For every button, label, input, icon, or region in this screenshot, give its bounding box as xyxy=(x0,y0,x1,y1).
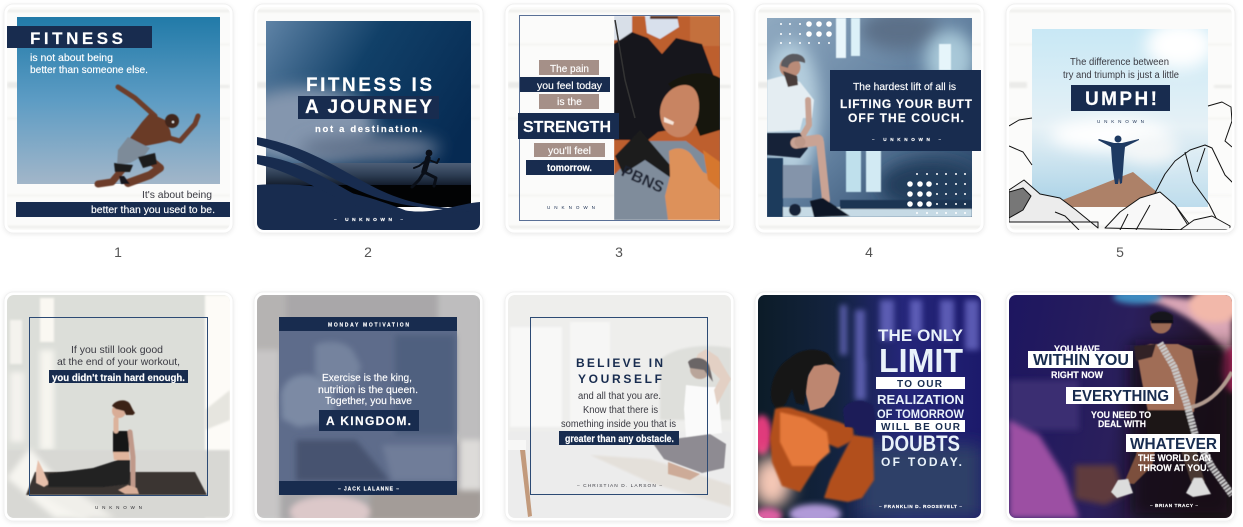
dots: bottom right xyxy=(907,173,966,214)
heading: fitness is a journey: A JOURNEY xyxy=(305,97,432,118)
text: quote body: greater than any obstacle. xyxy=(565,434,674,445)
photo: bright studio xyxy=(7,295,235,518)
text: still look good: at the end of your workout, xyxy=(57,356,180,368)
text: the difference between: try and triumph is just a little xyxy=(1063,70,1179,81)
attribution: – CHRISTIAN D. LARSON – xyxy=(577,483,662,489)
card 5: umph xyxy=(1006,4,1237,233)
text: exercise quote: nutrition is the queen. xyxy=(318,384,418,396)
frame xyxy=(520,16,720,220)
attribution: UNKNOWN xyxy=(547,205,595,210)
panel: translucent navy: – JACK LALANNE – xyxy=(338,486,399,492)
text stack: whatever xyxy=(1126,434,1220,473)
text stack: whatever: THE WORLD CAN xyxy=(1138,453,1211,463)
text: quote body: something inside you that is xyxy=(561,419,676,430)
label: 3: 3 xyxy=(615,244,623,260)
text stack: within you: RIGHT NOW xyxy=(1051,370,1103,380)
heading: the only limit: TO OUR xyxy=(897,379,943,390)
heading bar: FITNESS xyxy=(7,26,152,48)
attribution: – FRANKLIN D. ROOSEVELT – xyxy=(879,504,962,510)
photo: boxer in neon light xyxy=(752,295,981,524)
text: exercise quote xyxy=(318,372,418,407)
attribution: UNKNOWN xyxy=(95,505,142,510)
heading: fitness is a journey: FITNESS IS xyxy=(306,75,432,96)
icon: seated woman xyxy=(36,400,139,494)
icon: boxer xyxy=(770,350,876,502)
heading: the only limit: DOUBTS xyxy=(881,431,960,456)
photo: faded couple exercising xyxy=(257,295,480,518)
illustration: sketched mountains xyxy=(1009,102,1237,233)
heading: fitness is a journey: not a destination. xyxy=(315,124,422,135)
text stack: the pain: STRENGTH xyxy=(523,119,611,136)
heading bar: FITNESS: FITNESS xyxy=(30,29,123,48)
box: A KINGDOM. xyxy=(319,410,419,431)
photo: sky and summit xyxy=(1032,21,1214,207)
text stack: whatever: THROW AT YOU. xyxy=(1138,463,1209,473)
photo: gym trainer and lifter: PBNS xyxy=(619,163,666,197)
attribution: – BRIAN TRACY – xyxy=(1150,503,1198,509)
bar: used to be xyxy=(16,202,230,217)
panel: lifting quote: OFF THE COUCH. xyxy=(848,111,964,125)
photo: blue sky xyxy=(17,17,220,184)
panel: lifting quote: – UNKNOWN – xyxy=(872,137,941,142)
attribution: UNKNOWN xyxy=(1097,119,1144,124)
heading: the only limit: OF TODAY. xyxy=(881,455,962,469)
text: quote opening xyxy=(30,53,148,74)
text: the difference between xyxy=(1063,57,1179,81)
text stack: the pain: tomorrow. xyxy=(547,163,592,174)
text stack: within you xyxy=(1028,344,1133,380)
text stack: everything xyxy=(1066,387,1174,429)
heading: the only limit xyxy=(876,326,965,469)
text: quote body xyxy=(559,391,679,445)
text: still look good xyxy=(49,344,188,384)
card 6: yoga stretch xyxy=(4,292,235,521)
yoga mat xyxy=(26,472,207,495)
heading: the only limit: OF TOMORROW xyxy=(877,407,965,421)
text: exercise quote: Together, you have xyxy=(325,395,412,407)
text: quote body: and all that you are. xyxy=(578,391,661,402)
text stack: everything: DEAL WITH xyxy=(1098,419,1146,429)
text stack: within you: WITHIN YOU xyxy=(1033,352,1129,369)
text: about being: It's about being xyxy=(142,189,212,201)
photo: athlete with ropes xyxy=(1009,287,1243,518)
panel: lifting quote xyxy=(830,70,981,151)
label: 2: 2 xyxy=(364,244,372,260)
frame xyxy=(530,318,708,494)
box: A KINGDOM.: A KINGDOM. xyxy=(326,414,411,428)
card 3: strength xyxy=(505,4,734,233)
panel: translucent navy xyxy=(279,317,457,495)
illustration: sprinter xyxy=(98,87,198,184)
box: UMPH! xyxy=(1071,85,1170,111)
text: still look good: If you still look good xyxy=(71,344,163,356)
bar: used to be: better than you used to be. xyxy=(91,204,215,216)
text stack: the pain: is the xyxy=(557,96,582,108)
photo: man on gym bench xyxy=(767,18,972,217)
panel: lifting quote: LIFTING YOUR BUTT xyxy=(840,97,973,111)
text stack: everything: YOU NEED TO xyxy=(1091,410,1151,420)
shape: navy ground and swooshes xyxy=(257,137,480,230)
heading: believe in yourself: BELIEVE IN xyxy=(576,356,663,370)
text: quote opening: is not about being xyxy=(30,52,113,64)
panel: lifting quote: The hardest lift of all is xyxy=(853,81,956,93)
photo: gym trainer and lifter xyxy=(614,16,720,220)
label: 5: 5 xyxy=(1116,244,1124,260)
text stack: everything: EVERYTHING xyxy=(1072,388,1169,405)
card 2: journey runner xyxy=(235,4,483,233)
heading: the only limit: WILL BE OUR xyxy=(881,422,961,433)
icon: running silhouette xyxy=(412,150,439,187)
heading: believe in yourself xyxy=(576,356,663,386)
text: still look good: you didn't train hard enough. xyxy=(52,373,185,384)
photo: woman stretching in a bright room xyxy=(508,295,731,518)
frame xyxy=(30,318,208,496)
text stack: the pain: you feel today xyxy=(537,80,603,92)
text: quote body: Know that there is xyxy=(583,405,658,416)
card 10: battle ropes xyxy=(1006,287,1243,521)
text stack: within you: YOU HAVE xyxy=(1054,344,1100,354)
text: quote opening: better than someone else. xyxy=(30,64,148,76)
heading: the only limit: REALIZATION xyxy=(877,392,964,407)
box: UMPH!: UMPH! xyxy=(1085,89,1157,110)
label: 4: 4 xyxy=(865,244,873,260)
heading: the only limit: THE ONLY xyxy=(878,326,964,345)
card 1: fitness sprinter xyxy=(4,4,233,233)
card 7: monday motivation xyxy=(250,290,485,527)
text stack: whatever: WHATEVER xyxy=(1130,436,1217,453)
text: exercise quote: Exercise is the king, xyxy=(322,372,412,384)
card 8: believe in yourself xyxy=(505,292,734,521)
text stack: the pain: The pain xyxy=(550,63,589,75)
card 4: lifting your butt xyxy=(755,4,984,233)
label: 1: 1 xyxy=(114,244,122,260)
dots: top left xyxy=(780,21,832,44)
photo: evening sky xyxy=(266,21,471,207)
panel: translucent navy: MONDAY MOTIVATION xyxy=(328,322,409,328)
card 9: the only limit xyxy=(752,292,984,524)
text: the difference between: The difference between xyxy=(1070,57,1169,68)
heading: fitness is a journey xyxy=(298,75,439,135)
icon: person with raised arms xyxy=(1098,136,1139,184)
attribution: – UNKNOWN – xyxy=(334,217,403,223)
text stack: the pain xyxy=(518,60,619,175)
text stack: the pain: you'll feel xyxy=(548,145,591,157)
heading: the only limit: LIMIT xyxy=(879,342,963,379)
heading: believe in yourself: YOURSELF xyxy=(578,372,662,386)
